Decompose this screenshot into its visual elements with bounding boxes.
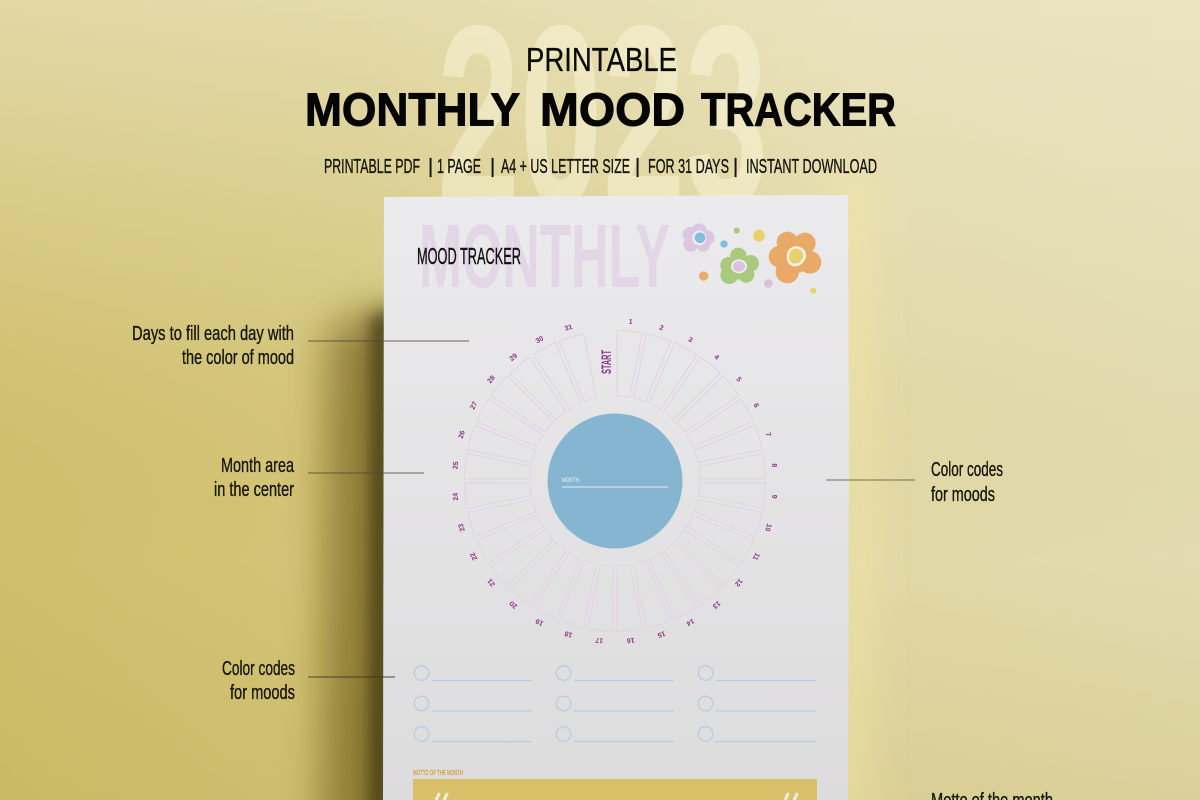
callout: month area: Month area bbox=[221, 455, 295, 477]
day numbers: 17 bbox=[595, 636, 604, 644]
feature strip: PRINTABLE PDF bbox=[324, 156, 420, 178]
day numbers: 27 bbox=[469, 401, 479, 411]
day numbers: 10 bbox=[763, 523, 772, 532]
title: MOOD bbox=[540, 84, 685, 136]
callout: color codes left bbox=[222, 658, 395, 704]
callout: days to fill: the color of mood bbox=[182, 347, 294, 369]
paper shadow bbox=[322, 300, 392, 800]
feature strip: | bbox=[490, 156, 495, 178]
callout: color codes right: for moods bbox=[931, 484, 995, 506]
callout: color codes right bbox=[826, 459, 1003, 506]
callout: days to fill bbox=[132, 323, 469, 369]
day numbers: 22 bbox=[469, 551, 479, 561]
day numbers: 11 bbox=[751, 551, 760, 561]
right quote mark bbox=[785, 793, 798, 800]
icon: scattered dots bbox=[699, 228, 816, 294]
day numbers: 4 bbox=[712, 354, 720, 362]
day numbers: 30 bbox=[535, 335, 545, 345]
feature strip: INSTANT DOWNLOAD bbox=[746, 156, 877, 178]
day numbers: 25 bbox=[452, 461, 460, 470]
day numbers bbox=[452, 319, 777, 644]
day numbers: 28 bbox=[487, 375, 497, 385]
sheet watermark: monthly: MONTHLY bbox=[419, 207, 670, 307]
feature strip: | bbox=[733, 156, 738, 178]
callout: color codes left: Color codes bbox=[222, 658, 295, 680]
callout: month area bbox=[214, 455, 424, 501]
callout: color codes right: Color codes bbox=[931, 459, 1003, 481]
day numbers: 1 bbox=[628, 319, 633, 326]
day numbers: 23 bbox=[458, 522, 467, 532]
feature strip: 1 PAGE bbox=[437, 156, 481, 178]
day numbers: 21 bbox=[486, 577, 497, 587]
title bbox=[305, 84, 896, 136]
day numbers: 3 bbox=[687, 336, 694, 344]
feature strip bbox=[324, 156, 877, 178]
sheet heading: mood tracker: MOOD TRACKER bbox=[417, 243, 521, 269]
day numbers: 13 bbox=[711, 599, 721, 610]
day numbers: 9 bbox=[770, 494, 777, 499]
day numbers: 31 bbox=[564, 324, 574, 333]
day numbers: 20 bbox=[509, 599, 519, 609]
feature strip: | bbox=[428, 156, 433, 178]
day numbers: 29 bbox=[509, 352, 519, 363]
day numbers: 18 bbox=[564, 629, 573, 638]
chart: radial 31 day wheel bbox=[452, 319, 777, 644]
feature strip: FOR 31 DAYS bbox=[648, 156, 729, 178]
left quote mark bbox=[436, 793, 448, 800]
motto label: MOTTO OF THE MONTH bbox=[413, 770, 463, 777]
icon: orange flower bbox=[769, 232, 821, 283]
day numbers: 12 bbox=[733, 577, 743, 587]
icon: flower decorations bbox=[683, 223, 821, 294]
callout: month area: in the center bbox=[214, 479, 294, 501]
heading: printable: PRINTABLE bbox=[526, 41, 677, 78]
callout: days to fill: Days to fill each day with bbox=[132, 323, 294, 345]
day cells bbox=[462, 330, 768, 634]
month label: MONTH bbox=[562, 477, 579, 484]
feature strip: | bbox=[635, 156, 640, 178]
day numbers: 5 bbox=[734, 376, 742, 384]
title: MONTHLY bbox=[305, 84, 520, 136]
icon: purple flower bbox=[683, 223, 715, 252]
panel: printable sheet bbox=[383, 195, 849, 800]
paper glow bbox=[835, 170, 870, 800]
day numbers: 7 bbox=[764, 432, 772, 438]
day numbers: 2 bbox=[658, 324, 664, 332]
legend: mood color codes bbox=[414, 666, 816, 742]
day numbers: 19 bbox=[535, 617, 545, 627]
day numbers: 6 bbox=[752, 402, 760, 409]
day numbers: 26 bbox=[458, 430, 467, 439]
start marker: START bbox=[598, 350, 614, 374]
title: TRACKER bbox=[701, 84, 896, 136]
day numbers: 8 bbox=[770, 463, 777, 468]
callout: color codes left: for moods bbox=[230, 682, 295, 704]
icon: green flower bbox=[720, 248, 759, 284]
day numbers: 14 bbox=[685, 617, 695, 627]
day numbers: 24 bbox=[452, 492, 460, 501]
motto box bbox=[413, 779, 817, 800]
day numbers: 15 bbox=[656, 629, 666, 638]
month circle bbox=[548, 414, 682, 548]
feature strip: A4 + US LETTER SIZE bbox=[501, 156, 630, 178]
day numbers: 16 bbox=[626, 636, 635, 644]
